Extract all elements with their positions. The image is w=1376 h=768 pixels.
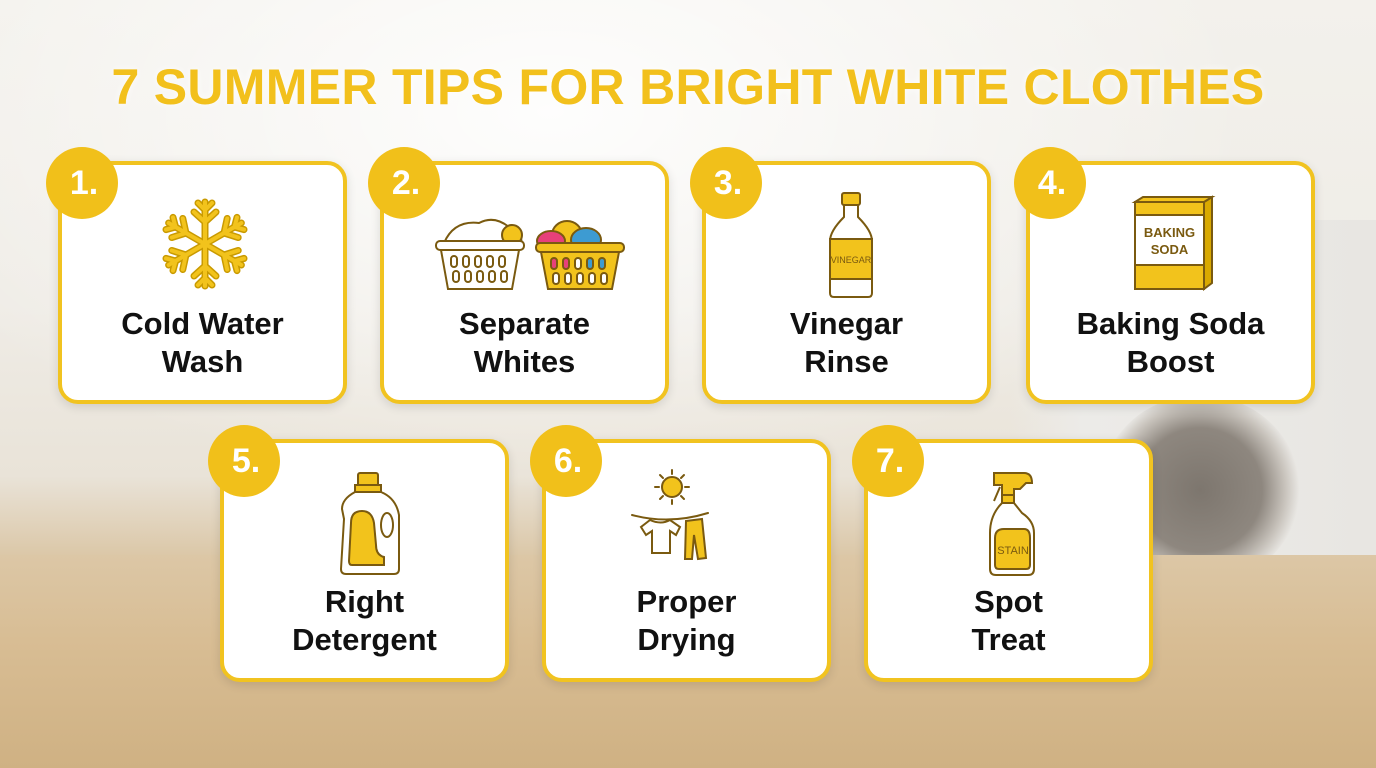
- label: Separate: [459, 306, 590, 341]
- panel: cold water wash: [58, 161, 347, 404]
- badge 7: 7.: [876, 442, 904, 480]
- label: Proper: [637, 584, 736, 619]
- badge 2: 2.: [392, 164, 420, 202]
- icon: baking soda box: BAKING: [1144, 225, 1195, 240]
- badge 7: [852, 425, 924, 497]
- panel: separate whites: [380, 161, 669, 404]
- panel: proper drying: [542, 439, 831, 682]
- icon: vinegar bottle: [829, 192, 873, 298]
- icon: sun and clothesline: [631, 469, 709, 560]
- icon: snowflake: [162, 198, 248, 290]
- badge 3: [690, 147, 762, 219]
- label: Right: [325, 584, 404, 619]
- label: Drying: [637, 622, 736, 657]
- label: [790, 306, 903, 379]
- badge 6: [530, 425, 602, 497]
- label: [121, 306, 284, 379]
- badge 1: [46, 147, 118, 219]
- label: Whites: [474, 344, 575, 379]
- badge 5: [208, 425, 280, 497]
- badge 6: 6.: [554, 442, 582, 480]
- badge 4: 4.: [1038, 164, 1066, 202]
- title: 7 SUMMER TIPS FOR BRIGHT WHITE CLOTHES: [111, 59, 1265, 115]
- label: Spot: [974, 584, 1043, 619]
- label: [1077, 306, 1265, 379]
- label: Rinse: [804, 344, 889, 379]
- label: [292, 584, 437, 657]
- label: Vinegar: [790, 306, 903, 341]
- label: Wash: [162, 344, 243, 379]
- label: [971, 584, 1046, 657]
- panel: vinegar rinse: [702, 161, 991, 404]
- icon: baking soda box: [1132, 195, 1216, 291]
- label: [459, 306, 590, 379]
- label: Cold Water: [121, 306, 284, 341]
- panel: spot treat: [864, 439, 1153, 682]
- icon: spray bottle: [989, 472, 1035, 576]
- icon: baking soda box: SODA: [1151, 242, 1189, 257]
- icon: detergent jug: [340, 472, 400, 575]
- panel: right detergent: [220, 439, 509, 682]
- icon: laundry baskets: [435, 218, 625, 290]
- panel: baking soda boost: [1026, 161, 1315, 404]
- label: Detergent: [292, 622, 437, 657]
- label: Boost: [1127, 344, 1214, 379]
- badge 5: 5.: [232, 442, 260, 480]
- badge 1: 1.: [70, 164, 98, 202]
- icon: spray bottle: STAIN: [997, 545, 1029, 557]
- badge 3: 3.: [714, 164, 742, 202]
- badge 2: [368, 147, 440, 219]
- label: Baking Soda: [1077, 306, 1264, 341]
- icon: vinegar bottle: VINEGAR: [831, 255, 872, 265]
- label: Treat: [971, 622, 1046, 657]
- label: [637, 584, 736, 657]
- badge 4: [1014, 147, 1086, 219]
